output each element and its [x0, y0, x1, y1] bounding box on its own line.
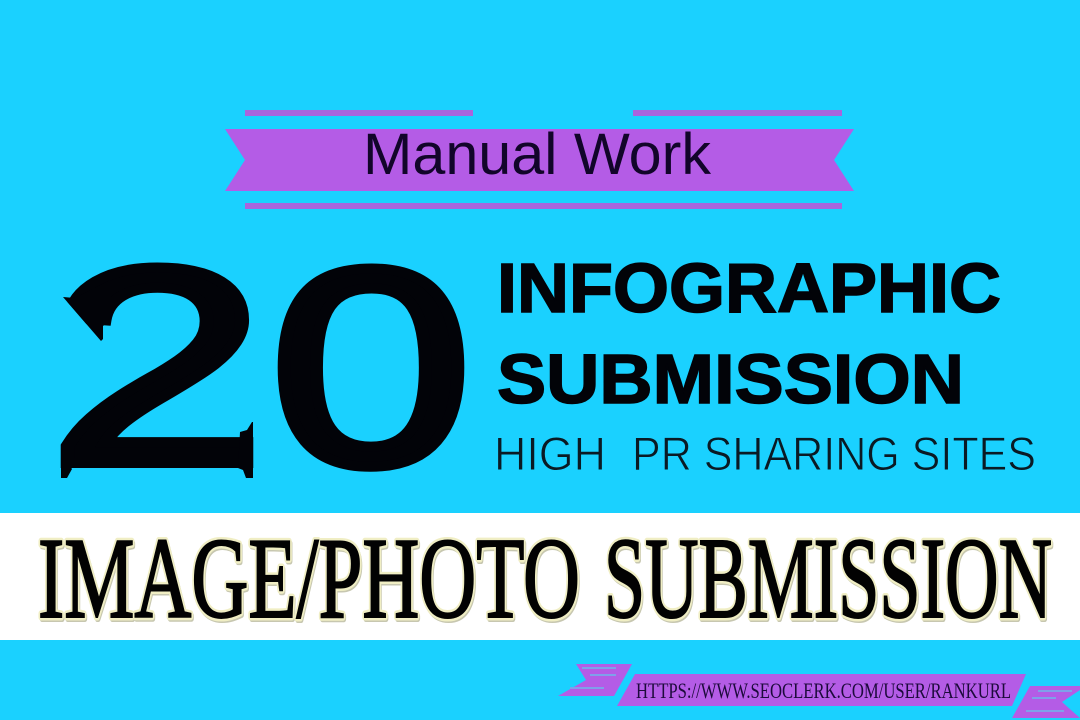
big number 20: 0 [270, 212, 472, 524]
white band [0, 513, 1080, 640]
title: image/photo submission: IMAGE/PHOTO [39, 517, 581, 645]
icon: left speed stripes [558, 664, 632, 696]
subheading: high pr sharing sites: PR SHARING SITES [632, 427, 1036, 480]
big number 20 [45, 211, 472, 524]
banner text: Manual Work [363, 122, 712, 187]
big number 20: 2 [48, 211, 266, 523]
title: image/photo submission: IMAGE/PHOTO [38, 515, 580, 643]
heading: infographic submission: SUBMISSION [497, 340, 964, 418]
title: image/photo submission: IMAGE/PHOTO [38, 515, 580, 643]
subheading: high pr sharing sites [494, 427, 1036, 480]
icon: right speed stripes [1012, 686, 1080, 718]
subheading: high pr sharing sites: HIGH [494, 427, 606, 480]
heading: infographic submission [497, 249, 1001, 418]
url ribbon [617, 674, 1026, 706]
banner: manual work [225, 110, 854, 209]
heading: infographic submission: INFOGRAPHIC [497, 249, 1001, 327]
